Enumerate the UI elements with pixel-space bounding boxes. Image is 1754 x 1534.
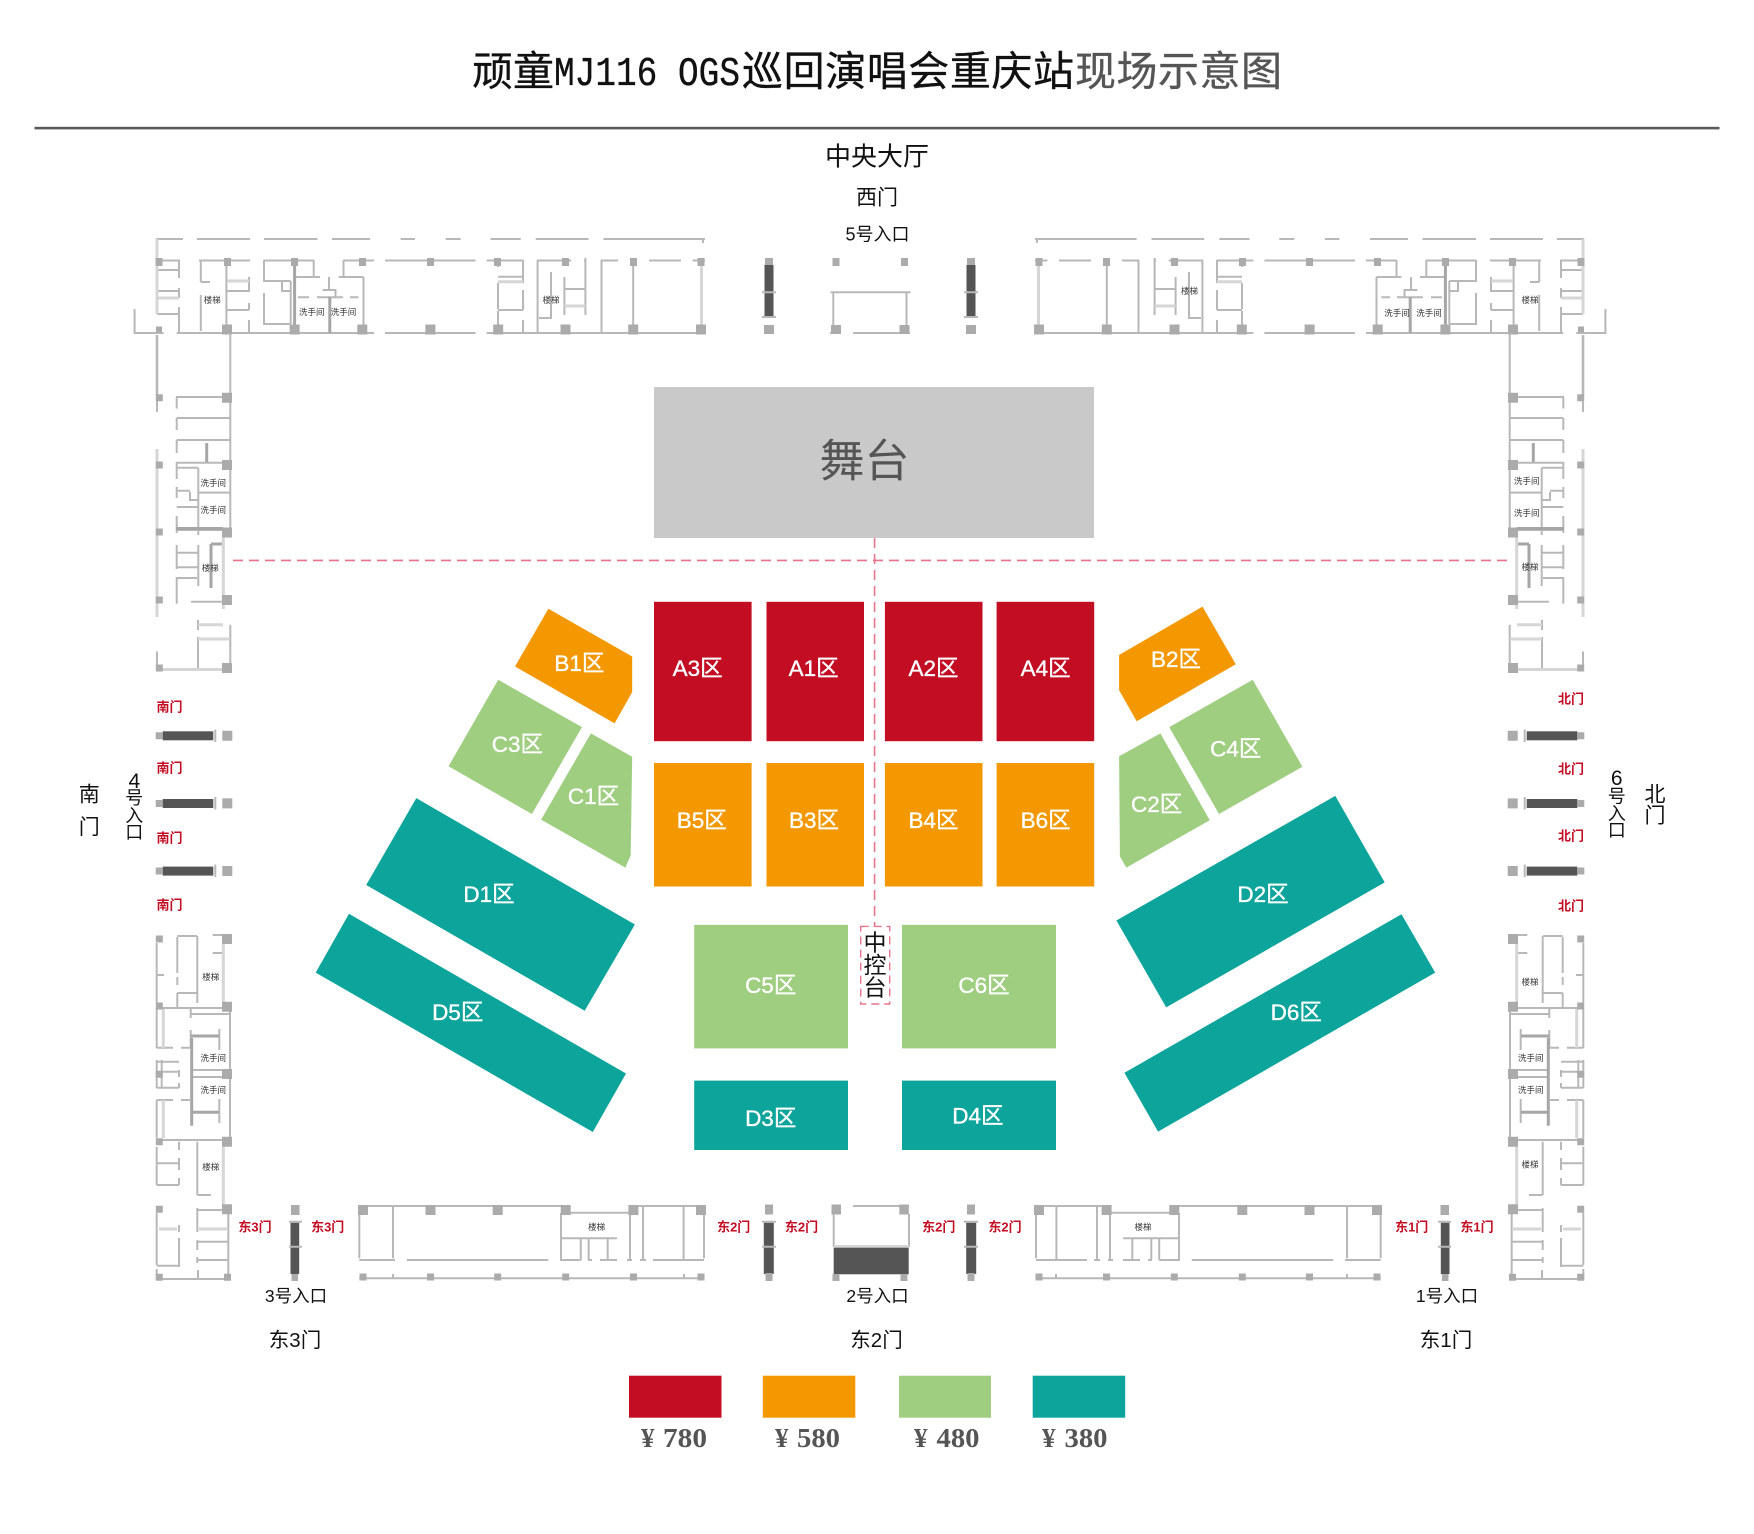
red door labels: south: 南门 (156, 898, 183, 912)
bottom block columns (358, 1205, 706, 1280)
zone A3 (654, 602, 752, 741)
red door labels: east: 东3门 (311, 1220, 344, 1234)
dashed guide lines (233, 538, 1511, 926)
label: entrance 6: 口 (1608, 820, 1626, 840)
top band columns (156, 258, 774, 334)
label: entrance 2: 2号入口 (846, 1286, 909, 1306)
red door labels: south (156, 700, 183, 912)
floor plan small labels: stairs and washrooms (201, 286, 1543, 1232)
red door labels: south: 南门 (156, 830, 183, 846)
zone B4: B4区 (908, 808, 959, 833)
upper side block walls (157, 333, 230, 670)
red door labels: north (1558, 692, 1584, 914)
floor plan small labels: stairs and washrooms: 楼梯 (588, 1222, 606, 1232)
label: north gate (1644, 784, 1666, 828)
zone B5: B5区 (677, 808, 727, 833)
red door labels: south: 南门 (156, 700, 183, 714)
title: 巡回演唱会重庆站 (742, 48, 1074, 94)
floor plan small labels: stairs and washrooms: 洗手间 (331, 307, 356, 317)
legend: 480: ¥ (914, 1423, 928, 1453)
zone C1: C1区 (568, 784, 619, 809)
zone A1 (766, 602, 864, 741)
floor plan small labels: stairs and washrooms: 楼梯 (1521, 295, 1539, 305)
zone D4 (902, 1081, 1056, 1150)
bottom block walls (359, 1206, 704, 1278)
title: 顽童 (472, 48, 554, 94)
zone D4: D4区 (952, 1104, 1004, 1128)
zone A1: A1区 (789, 656, 839, 681)
zone D6 (1124, 914, 1435, 1132)
zone B1: B1区 (554, 651, 604, 676)
top band heavy walls (295, 260, 330, 333)
legend: 580 (763, 1376, 855, 1453)
zone B5 (654, 763, 752, 886)
label: entrance 6: 号 (1608, 786, 1626, 806)
floor plan small labels: stairs and washrooms: 洗手间 (1514, 476, 1539, 486)
red door labels: east: 东1门 (1460, 1220, 1494, 1234)
label: entrance 4: 号 (125, 788, 143, 808)
red door labels: east: 东2门 (988, 1220, 1022, 1234)
top band gate (762, 265, 776, 317)
red door labels: east: 东2门 (717, 1220, 750, 1234)
title rule (34, 127, 1720, 129)
label: entrance 3: 3号入口 (265, 1286, 327, 1306)
floor plan small labels: stairs and washrooms: 楼梯 (202, 1162, 220, 1172)
zone B4 (885, 763, 982, 886)
floor plan small labels: stairs and washrooms: 楼梯 (1521, 977, 1539, 987)
label: entrance 1: 1号入口 (1416, 1286, 1478, 1306)
red door labels: east: 东2门 (922, 1220, 955, 1234)
zone D3: D3区 (745, 1106, 796, 1131)
title: MJ116 OGS (554, 52, 740, 98)
legend: 780: ¥ (641, 1423, 655, 1453)
legend: 380: ¥ (1042, 1423, 1056, 1453)
red door labels: east: 东2门 (785, 1220, 818, 1234)
zone B2 (1119, 607, 1236, 721)
floor plan small labels: stairs and washrooms: 楼梯 (1134, 1222, 1152, 1232)
legend: 480: 480 (936, 1423, 980, 1453)
label: north gate: 北 (1644, 784, 1666, 806)
zone C4: C4区 (1210, 736, 1261, 762)
zone D6: D6区 (1271, 1000, 1322, 1025)
zone C3 (448, 680, 582, 814)
floor plan small labels: stairs and washrooms: 楼梯 (542, 295, 560, 305)
floor plan: centre top lobby (830, 258, 910, 334)
zone A4: A4区 (1021, 656, 1071, 681)
zone D1: D1区 (463, 882, 515, 907)
label: entrance 4: 4 (128, 770, 140, 793)
floor plan: right wing walls and gates (964, 239, 1605, 1281)
label: entrance 6: 6 (1611, 767, 1623, 790)
label: north gate: 门 (1644, 804, 1666, 828)
zone A3: A3区 (673, 656, 723, 681)
floor plan small labels: stairs and washrooms: 洗手间 (201, 505, 226, 515)
zone C2: C2区 (1131, 792, 1182, 817)
upper side block columns (156, 393, 232, 673)
floor plan small labels: stairs and washrooms: 洗手间 (1514, 508, 1539, 518)
label: south gate: 南 (79, 784, 100, 806)
zone A2: A2区 (908, 656, 959, 681)
label: east gate 2: 东2门 (850, 1329, 903, 1352)
zone D5: D5区 (432, 1000, 483, 1025)
stage: 舞台 (819, 436, 910, 486)
legend: 480 (899, 1376, 991, 1453)
label: east gate 1: 东1门 (1420, 1329, 1472, 1352)
floor plan small labels: stairs and washrooms: 洗手间 (299, 307, 325, 317)
zone D5 (316, 914, 626, 1132)
zone C4 (1169, 680, 1302, 814)
control desk: 中 (864, 930, 886, 956)
label: east gate 3: 东3门 (269, 1329, 321, 1352)
red door labels: north: 北门 (1558, 762, 1584, 776)
zone B3 (766, 763, 864, 886)
floor plan small labels: stairs and washrooms: 洗手间 (1518, 1053, 1543, 1063)
zone A2 (885, 602, 982, 741)
lower side block walls (157, 935, 230, 1279)
floor plan small labels: stairs and washrooms: 洗手间 (201, 1085, 226, 1095)
floor plan small labels: stairs and washrooms: 楼梯 (204, 295, 221, 305)
lower side block columns (156, 934, 232, 1281)
label: entrance 4 (125, 770, 143, 842)
bottom gate 3 (289, 1205, 302, 1281)
stage (654, 387, 1094, 538)
floor plan small labels: stairs and washrooms: 洗手间 (201, 1053, 226, 1063)
top band walls (135, 239, 705, 333)
floor plan small labels: stairs and washrooms: 楼梯 (202, 563, 219, 573)
label: central hall: 中央大厅 (825, 142, 929, 172)
label: south gate: 门 (79, 816, 100, 839)
legend: 780 (629, 1376, 722, 1453)
floor plan: centre bottom lobby with gate 2 (832, 1204, 909, 1281)
zone C1 (541, 733, 632, 868)
zone C3: C3区 (492, 732, 543, 757)
floor plan small labels: stairs and washrooms: 洗手间 (1518, 1085, 1543, 1095)
legend: 580: ¥ (775, 1423, 789, 1453)
red door labels: north: 北门 (1558, 828, 1584, 844)
floor plan: left wing walls and gates (135, 239, 776, 1281)
label: south gate (79, 784, 100, 839)
zone B1 (515, 609, 632, 723)
zone C2 (1119, 733, 1210, 868)
legend: 380 (1033, 1376, 1125, 1453)
zone B2: B2区 (1151, 647, 1201, 672)
floor plan small labels: stairs and washrooms: 楼梯 (1521, 1160, 1539, 1170)
floor plan small labels: stairs and washrooms: 洗手间 (1416, 308, 1442, 318)
legend: 380: 380 (1064, 1423, 1108, 1453)
zone D1 (366, 798, 635, 1011)
zone D3 (694, 1081, 848, 1150)
red door labels: north: 北门 (1558, 692, 1584, 706)
red door labels: east: 东3门 (238, 1220, 272, 1234)
label: west gate: 西门 (856, 186, 898, 210)
label: entrance 6: 入 (1608, 804, 1626, 824)
label: entrance 4: 入 (125, 806, 143, 826)
zone B3: B3区 (789, 808, 839, 833)
title (472, 48, 1282, 98)
floor plan small labels: stairs and washrooms: 楼梯 (202, 972, 220, 982)
zone C5 (694, 925, 848, 1048)
floor plan small labels: stairs and washrooms: 洗手间 (1384, 308, 1410, 318)
zone C6: C6区 (958, 973, 1010, 998)
zone A4 (997, 602, 1094, 741)
zone C5: C5区 (745, 973, 796, 998)
legend: 580: 580 (797, 1423, 840, 1453)
label: entrance 6 (1608, 767, 1626, 840)
side gates (156, 730, 232, 877)
title: 现场示意图 (1075, 48, 1282, 94)
red door labels: east (238, 1220, 1494, 1234)
zone C6 (902, 925, 1056, 1048)
legend: 780: 780 (663, 1423, 707, 1453)
label: entrance 4: 口 (125, 822, 143, 842)
floor plan small labels: stairs and washrooms: 楼梯 (1181, 286, 1198, 296)
zone B6 (997, 763, 1094, 886)
control desk: 台 (864, 974, 886, 1000)
control desk (861, 926, 890, 1004)
red door labels: south: 南门 (156, 760, 183, 776)
zone D2: D2区 (1237, 882, 1289, 907)
control desk: 控 (864, 952, 886, 978)
label: entrance 5: 5号入口 (845, 224, 910, 244)
floor plan small labels: stairs and washrooms: 楼梯 (1521, 562, 1539, 572)
zone B6: B6区 (1021, 808, 1071, 833)
bottom gate 2 west (762, 1204, 776, 1281)
floor plan small labels: stairs and washrooms: 洗手间 (201, 478, 226, 488)
red door labels: east: 东1门 (1395, 1220, 1428, 1234)
red door labels: north: 北门 (1558, 898, 1584, 914)
zone D2 (1116, 796, 1385, 1007)
